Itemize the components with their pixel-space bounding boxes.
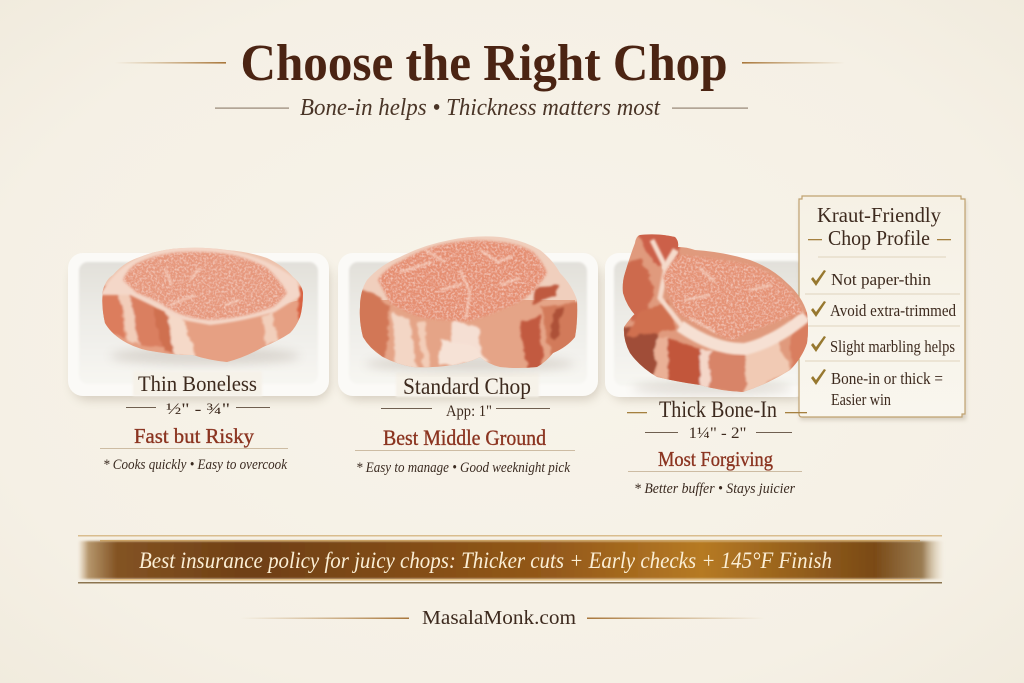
checklist item: slight marbling helps: Slight marbling helps (830, 337, 955, 356)
panel: thick bone-in (615, 228, 815, 497)
meat: thick chop (622, 234, 808, 397)
banner: Best insurance policy for juicy chops: Thicker cuts + Early checks + 145°F Finish (139, 548, 832, 573)
panel heading (808, 203, 951, 250)
subtitle: Bone-in helps • Thickness matters most (300, 95, 661, 121)
banner (78, 535, 944, 584)
label: standard chop: Standard Chop (403, 374, 531, 399)
title: Choose the Right Chop (240, 35, 728, 92)
verdict: fast but risky: Fast but Risky (134, 424, 254, 448)
checklist item: bone-in or thick: Easier win (831, 390, 891, 409)
checklist item: not paper-thin: Not paper-thin (831, 270, 931, 289)
verdict: most forgiving: Most Forgiving (658, 447, 773, 471)
thickness: standard: App: 1" (446, 403, 492, 420)
label: thick bone-in: Thick Bone-In (659, 397, 777, 422)
tray: standard (338, 253, 600, 400)
meat: standard chop (360, 236, 578, 375)
panel: standard chop (338, 230, 600, 476)
panel: kraut-friendly chop profile (799, 196, 966, 420)
panel: thin boneless (68, 240, 330, 473)
checklist item: bone-in or thick (811, 369, 943, 409)
thickness: thin: ½" - ¾" (166, 401, 230, 418)
verdict: best middle ground: Best Middle Ground (383, 425, 546, 450)
note: thick: * Better buffer • Stays juicier (634, 481, 795, 497)
panel heading: Kraut-Friendly (817, 203, 941, 227)
footer: website: MasalaMonk.com (422, 607, 576, 629)
note: thin: * Cooks quickly • Easy to overcook (103, 457, 287, 473)
thickness: thick: 1¼" - 2" (688, 425, 746, 442)
tray: thick (605, 253, 810, 400)
checklist item: avoid extra-trimmed: Avoid extra-trimmed (830, 301, 957, 320)
tray: thin boneless (68, 253, 330, 400)
meat: thin chop (102, 248, 303, 368)
note: standard: * Easy to manage • Good weeknight pick (356, 460, 570, 476)
checklist item: bone-in or thick: Bone-in or thick = (831, 369, 943, 388)
label: thin boneless: Thin Boneless (138, 371, 257, 396)
panel heading: Chop Profile (828, 226, 930, 250)
